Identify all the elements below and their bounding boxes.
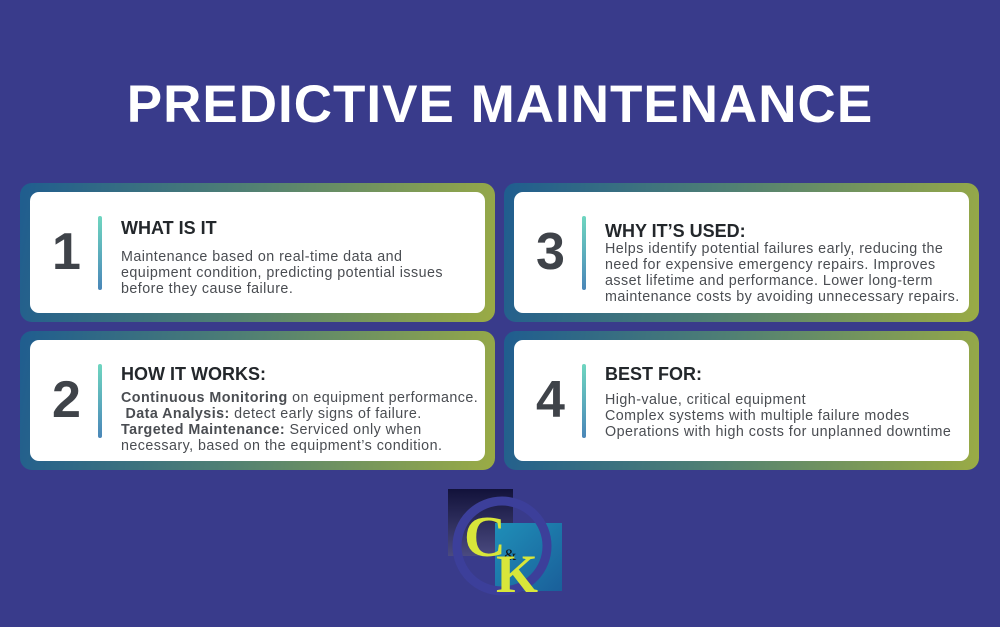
panel: what is it: equipment condition, predicting potential issues <box>121 265 443 281</box>
panel: best for <box>504 331 979 470</box>
panel: what is it <box>20 183 495 322</box>
panel: why it's used: WHY IT’S USED: <box>605 221 746 241</box>
panel: how it works: HOW IT WORKS: <box>121 364 266 384</box>
panel: why it's used <box>504 183 979 322</box>
panel: why it's used: 3 <box>536 223 565 281</box>
panel: best for: High-value, critical equipment <box>605 392 806 408</box>
panel: how it works: Continuous Monitoring on equipment performance. <box>121 390 478 406</box>
logo: K <box>496 544 538 604</box>
panel: how it works <box>20 331 495 470</box>
panel: how it works: Data Analysis: detect early signs of failure. <box>125 406 422 422</box>
panel: best for: Complex systems with multiple failure modes <box>605 408 910 424</box>
panel: best for: BEST FOR: <box>605 364 702 384</box>
panel: what is it: WHAT IS IT <box>121 218 217 238</box>
title: PREDICTIVE MAINTENANCE <box>127 75 873 134</box>
panel: how it works: 2 <box>52 371 81 429</box>
logo: & <box>504 547 517 564</box>
logo <box>448 489 562 604</box>
logo: C <box>464 504 506 569</box>
panel: what is it: before they cause failure. <box>121 281 293 297</box>
panel: what is it: 1 <box>52 223 81 281</box>
panel: how it works: Targeted Maintenance: Serviced only when <box>121 422 422 438</box>
panel: best for: 4 <box>536 371 565 429</box>
panel: what is it: Maintenance based on real-time data and <box>121 249 402 265</box>
panel: how it works: necessary, based on the equipment’s condition. <box>121 438 442 454</box>
panel: why it's used: Helps identify potential failures early, reducing the <box>605 241 943 257</box>
panel: why it's used: need for expensive emergency repairs. Improves <box>605 257 936 273</box>
panel: why it's used: maintenance costs by avoiding unnecessary repairs. <box>605 289 960 305</box>
panel: why it's used: asset lifetime and performance. Lower long-term <box>605 273 933 289</box>
panel: best for: Operations with high costs for unplanned downtime <box>605 424 951 440</box>
